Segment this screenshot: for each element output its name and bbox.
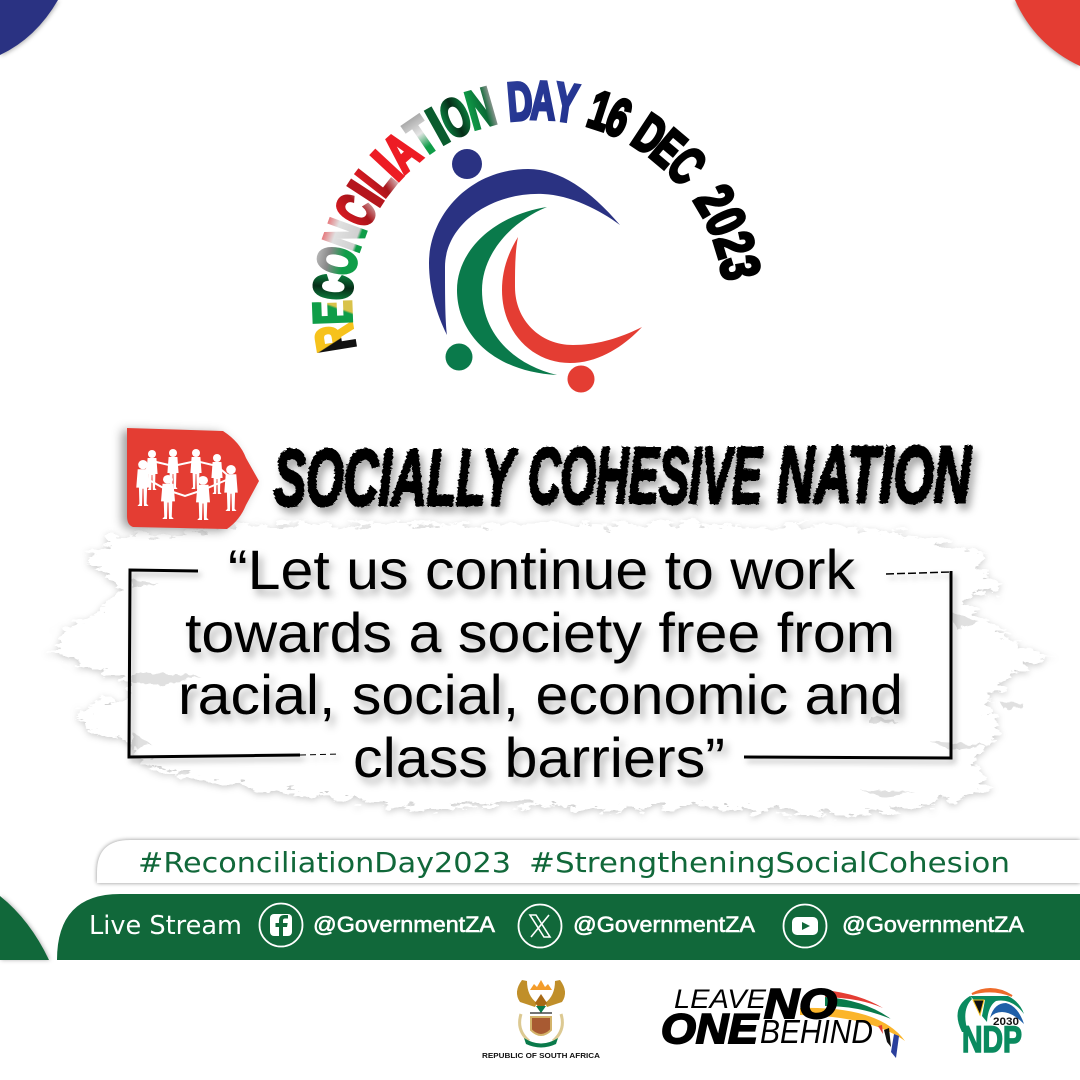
logo: Leave No One Behind: ONE [661,1005,760,1052]
corner: blue top-left [0,0,58,55]
heading: Socially Cohesive Nation: SOCIALLY [274,433,518,522]
logo: three crescent figures [429,149,642,392]
curved title: Reconciliation Day 16 Dec 2023: O [305,241,370,280]
curved title: Reconciliation Day 16 Dec 2023: C [302,272,365,302]
social bar [57,894,1080,960]
brush flecks [130,580,1025,796]
handle: facebook: @GovernmentZA [313,912,495,937]
brush panel behind the quote [52,521,1055,815]
hashtags [138,846,1010,879]
curved title: Reconciliation Day 16 Dec 2023 [302,70,771,356]
curved title: Reconciliation Day 16 Dec 2023: Y [550,71,582,134]
curved title: Reconciliation Day 16 Dec 2023: 2 [682,175,746,225]
curved title: Reconciliation Day 16 Dec 2023: C [656,136,717,196]
logo: NDP 2030 [958,989,1024,1060]
icon: YouTube [784,904,826,948]
logo: Leave No One Behind: BEHIND [760,1013,873,1050]
quote text: towards a society free from [185,601,895,664]
curved title: Reconciliation Day 16 Dec 2023: A [371,120,431,183]
logo: Leave No One Behind: NO [764,980,837,1027]
red figure [502,237,642,392]
quote text: “Let us continue to work [228,538,856,601]
corner: red top-right [1015,0,1080,66]
logo: Leave No One Behind [661,980,905,1058]
hashtags: #ReconciliationDay2023 [138,846,511,879]
heading: Socially Cohesive Nation [274,430,972,522]
curved title: Reconciliation Day 16 Dec 2023: 3 [708,252,771,284]
green figure [446,207,557,375]
curved title: Reconciliation Day 16 Dec 2023: N [312,212,378,258]
leaf: green bottom-left corner [0,896,49,960]
quote text: class barriers” [353,726,725,789]
curved title: Reconciliation Day 16 Dec 2023: 6 [597,85,640,149]
curved title: Reconciliation Day 16 Dec 2023: D [622,102,677,167]
curved title: Reconciliation Day 16 Dec 2023: N [459,75,502,141]
hashtag bar [97,840,1080,883]
curved title: Reconciliation Day 16 Dec 2023: 0 [693,200,757,244]
frame around the quote [129,570,951,758]
heading: Socially Cohesive Nation: NATION [777,430,972,519]
curved title: Reconciliation Day 16 Dec 2023: L [346,152,406,206]
curved title: Reconciliation Day 16 Dec 2023: I [418,98,458,156]
hashtags: #StrengtheningSocialCohesion [529,846,1010,879]
quote text [178,538,903,789]
live stream label: Live Stream [89,911,242,941]
caption: Republic of South Africa: REPUBLIC OF SOUTH AFRICA [482,1051,601,1060]
blue figure [429,149,620,335]
icon: facebook [260,904,302,946]
curved title: Reconciliation Day 16 Dec 2023: T [396,105,448,167]
curved title: Reconciliation Day 16 Dec 2023: 1 [581,78,619,142]
curved title: Reconciliation Day 16 Dec 2023: E [302,300,363,325]
logo: NDP 2030: 2030 [993,1016,1019,1028]
coat of arms [517,980,565,1048]
curved title: Reconciliation Day 16 Dec 2023: I [362,142,414,191]
curved title: Reconciliation Day 16 Dec 2023: E [640,118,697,179]
icon: children holding hands [136,449,238,520]
handle: X: @GovernmentZA [573,912,755,937]
handle: YouTube: @GovernmentZA [842,912,1024,937]
quote text: racial, social, economic and [178,663,903,726]
logo: Leave No One Behind: LEAVE [674,984,767,1014]
badge: red tag with children in a circle [127,428,259,529]
curved title: Reconciliation Day 16 Dec 2023: O [431,84,480,151]
curved title: Reconciliation Day 16 Dec 2023: C [323,185,388,236]
curved title: Reconciliation Day 16 Dec 2023: A [530,70,556,131]
icon: X [518,904,562,948]
curved title: Reconciliation Day 16 Dec 2023: I [338,172,395,215]
heading: Socially Cohesive Nation: COHESIVE [528,431,763,520]
curved title: Reconciliation Day 16 Dec 2023: 2 [702,225,766,264]
curved title: Reconciliation Day 16 Dec 2023: R [303,320,367,356]
curved title: Reconciliation Day 16 Dec 2023: D [505,70,535,133]
logo: NDP 2030: NDP [962,1019,1022,1060]
